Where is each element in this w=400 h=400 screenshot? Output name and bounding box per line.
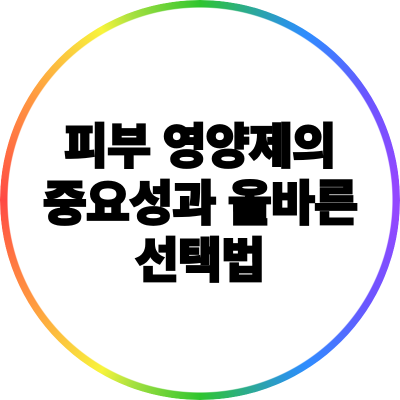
title line 3: 선택법 — [135, 235, 264, 288]
title line 2: 중요성과 올바른 — [43, 178, 357, 231]
title line 1: 피부 영양제의 — [64, 121, 335, 174]
